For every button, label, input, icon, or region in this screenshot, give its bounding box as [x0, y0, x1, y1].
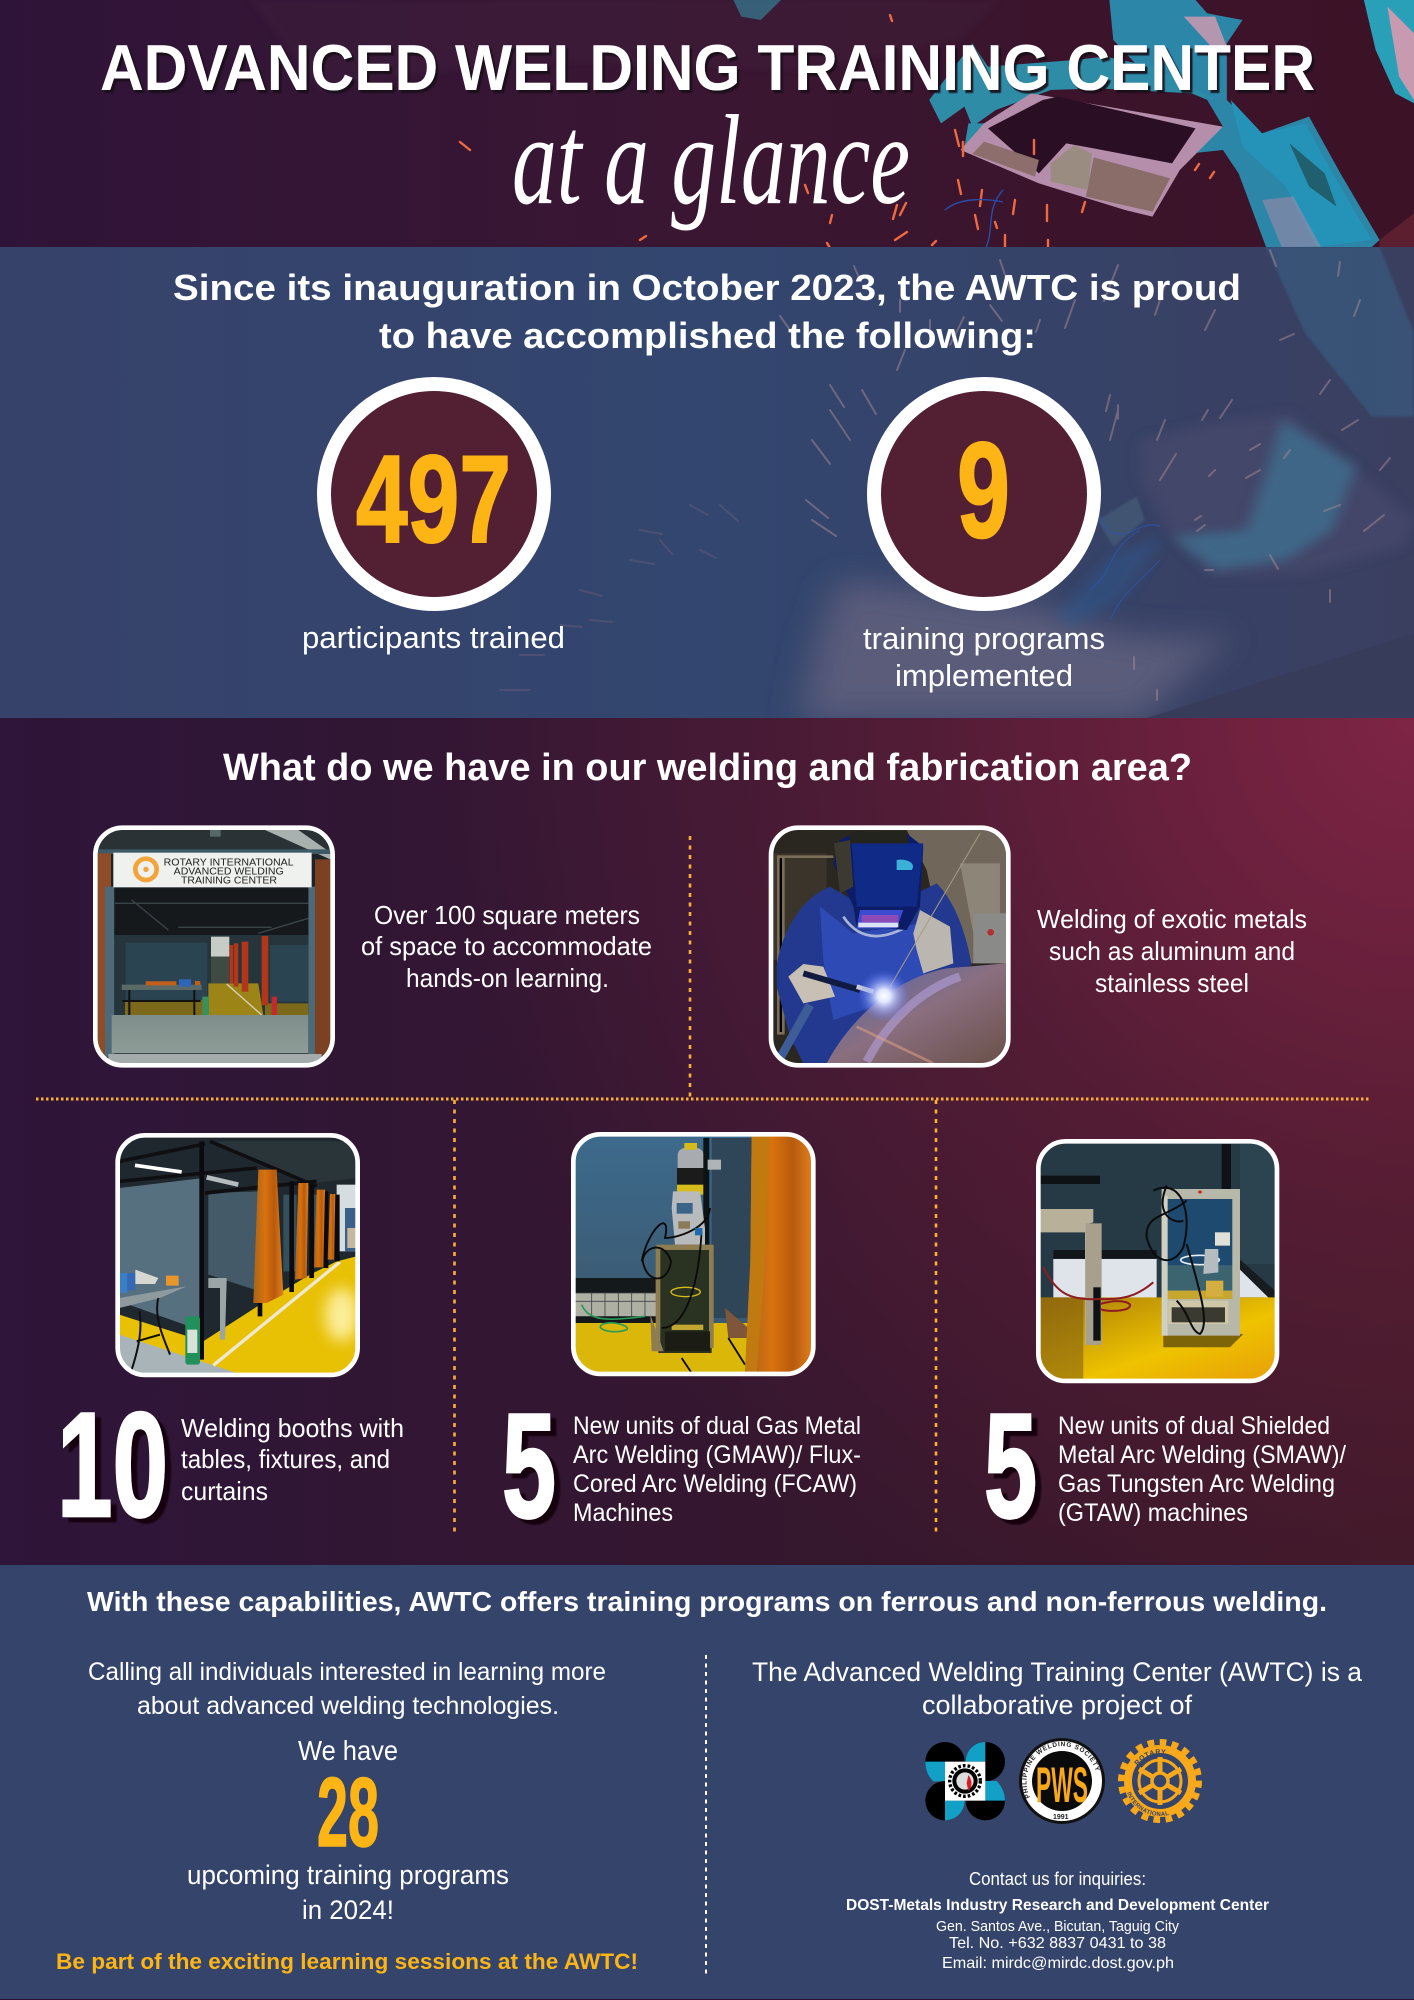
collaboration text — [752, 1657, 1363, 1720]
stat: 10 welding booths: curtains — [181, 1476, 268, 1506]
stat: 5 SMAW/GTAW machines: New units of dual Shielded — [1058, 1412, 1330, 1440]
photo: GMAW/FCAW machine — [573, 1134, 815, 1375]
stat: 10 welding booths: Welding booths with — [181, 1413, 404, 1443]
call to action text — [56, 1658, 638, 1974]
call to action text: 28 — [317, 1757, 379, 1867]
stat: 5 GMAW/FCAW machines: Arc Welding (GMAW)/ Flux- — [573, 1441, 861, 1469]
text: space description: hands-on learning. — [406, 963, 609, 993]
panel: welding and fabrication area — [0, 718, 1414, 1565]
stat: 5 GMAW/FCAW machines: Machines — [573, 1499, 673, 1527]
stat: 5 SMAW/GTAW machines: Metal Arc Welding (SMAW)/ — [1058, 1441, 1346, 1469]
call to action text: about advanced welding technologies. — [137, 1692, 559, 1720]
stat: 9 training programs implemented: training programs — [863, 621, 1105, 656]
logo: Rotary International: INTERNATIONAL — [1127, 1792, 1169, 1816]
photo: SMAW/GTAW machine — [1038, 1141, 1280, 1381]
header background: welder glove and torch photo — [250, 0, 1414, 250]
contact details: Contact us for inquiries: — [969, 1869, 1146, 1889]
call to action text: Be part of the exciting learning sessions at the AWTC! — [56, 1949, 638, 1974]
accomplishments heading: to have accomplished the following: — [379, 315, 1036, 356]
stat: 5 SMAW/GTAW machines: 5 — [984, 1382, 1037, 1549]
contact details: Gen. Santos Ave., Bicutan, Taguig City — [936, 1918, 1179, 1935]
text: exotic metals description: such as aluminum and — [1049, 936, 1295, 966]
panel: header banner — [0, 0, 1414, 250]
stat: 10 welding booths: 10 — [57, 1381, 168, 1548]
photo: welding booths — [117, 1135, 360, 1375]
stat: 497 participants trained — [302, 384, 565, 655]
accomplishments background: welding photo — [500, 247, 1414, 720]
text: space description: of space to accommodate — [361, 931, 652, 961]
logo: Philippine Welding Society: PWS — [1036, 1757, 1088, 1813]
stat: 497 participants trained: 497 — [356, 431, 511, 569]
text: exotic metals description: Welding of exotic metals — [1037, 904, 1307, 934]
stat: 5 SMAW/GTAW machines — [984, 1382, 1346, 1549]
dotted dividers — [36, 836, 1369, 1533]
logo: Philippine Welding Society: 1991 — [1053, 1814, 1069, 1821]
photo: training center entrance: ROTARY INTERNATIONAL — [164, 857, 294, 868]
subtitle: at a glance: at a glance — [512, 89, 910, 231]
logo: Rotary International: ROTARY — [1134, 1749, 1166, 1765]
stat: 10 welding booths — [57, 1381, 404, 1548]
collaboration text: collaborative project of — [922, 1690, 1192, 1720]
call to action text: in 2024! — [302, 1895, 394, 1925]
stat: 9 training programs implemented — [863, 384, 1105, 693]
accomplishments heading — [173, 267, 1241, 356]
panel: capabilities and contact — [0, 1565, 1414, 1999]
divider — [705, 1655, 707, 1974]
contact details — [846, 1869, 1269, 1972]
text: exotic metals description: stainless steel — [1095, 968, 1249, 998]
text: space description — [361, 900, 652, 993]
collaboration text: The Advanced Welding Training Center (AWTC) is a — [752, 1657, 1363, 1687]
stat: 10 welding booths: tables, fixtures, and — [181, 1444, 390, 1474]
area heading: What do we have in our welding and fabrication area? — [223, 747, 1192, 789]
text: exotic metals description — [1037, 904, 1307, 998]
photo: welder with exotic metal — [770, 827, 1010, 1067]
call to action text: upcoming training programs — [187, 1860, 509, 1890]
text: space description: Over 100 square meters — [374, 900, 640, 930]
panel: accomplishments — [0, 247, 1414, 720]
photo: training center entrance — [95, 827, 335, 1067]
title: ADVANCED WELDING TRAINING CENTER — [100, 31, 1315, 104]
logo: DOST — [925, 1742, 1005, 1820]
accomplishments heading: Since its inauguration in October 2023, the AWTC is proud — [173, 267, 1241, 308]
call to action text: We have — [298, 1735, 398, 1766]
stat: 5 GMAW/FCAW machines: Cored Arc Welding (FCAW) — [573, 1470, 857, 1498]
contact details: Tel. No. +632 8837 0431 to 38 — [949, 1935, 1166, 1952]
logo: Philippine Welding Society: PHILIPPINE WELDING SOCIETY — [1022, 1742, 1100, 1798]
contact details: Email: mirdc@mirdc.dost.gov.ph — [942, 1955, 1174, 1972]
logo: Rotary International — [1118, 1739, 1202, 1823]
stat: 5 SMAW/GTAW machines: (GTAW) machines — [1058, 1499, 1248, 1527]
stat: 9 training programs implemented: implemented — [895, 658, 1073, 693]
stat: 497 participants trained: participants trained — [302, 620, 565, 655]
capabilities heading: With these capabilities, AWTC offers training programs on ferrous and non-ferrous welding. — [87, 1586, 1327, 1617]
photo: training center entrance: TRAINING CENTER — [181, 876, 277, 887]
header sparks — [460, 15, 1214, 248]
stat: 5 GMAW/FCAW machines — [502, 1382, 861, 1549]
logo: Philippine Welding Society — [1019, 1738, 1105, 1824]
stat: 5 SMAW/GTAW machines: Gas Tungsten Arc Welding — [1058, 1470, 1335, 1498]
call to action text: Calling all individuals interested in learning more — [88, 1658, 606, 1686]
stat: 5 GMAW/FCAW machines: New units of dual Gas Metal — [573, 1412, 861, 1440]
stat: 9 training programs implemented: 9 — [957, 414, 1010, 566]
stat: 5 GMAW/FCAW machines: 5 — [502, 1382, 556, 1549]
photo: training center entrance: ADVANCED WELDING — [174, 866, 284, 877]
contact details: DOST-Metals Industry Research and Development Center — [846, 1897, 1269, 1914]
accomplishments sparks — [780, 250, 1390, 700]
